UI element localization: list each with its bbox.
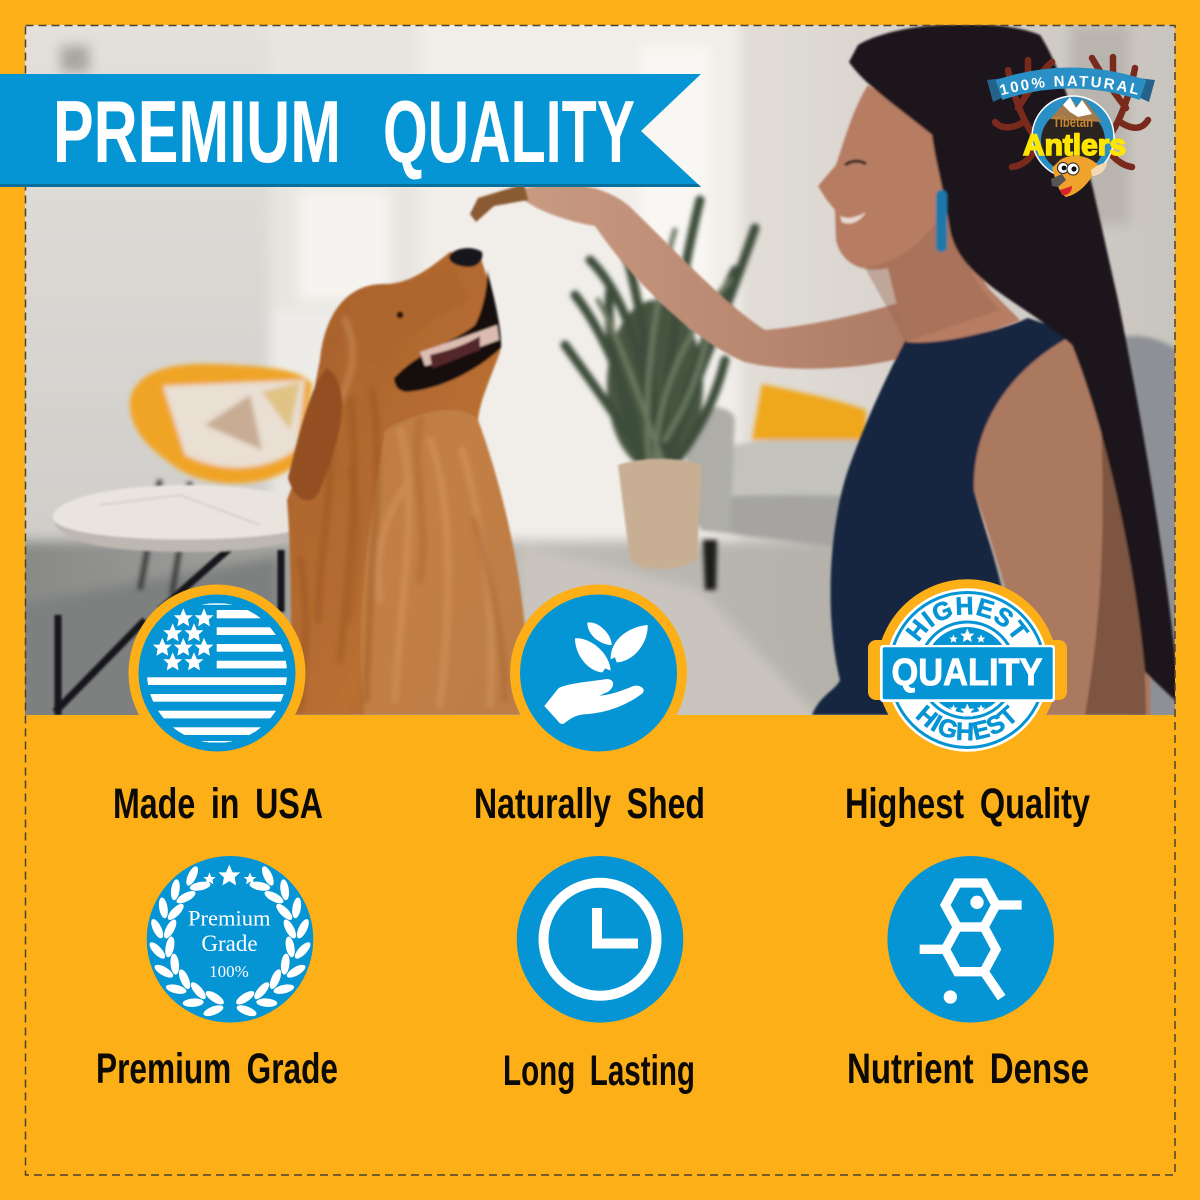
- far arm and hand: [522, 184, 925, 369]
- logo ribbon text: 100% NATURAL: [1000, 76, 1138, 96]
- wreath text: Premium: [188, 906, 271, 930]
- brand logo: [987, 54, 1155, 197]
- icon: highest quality seal: HIGHEST: [915, 704, 1016, 740]
- logo deer face: [1052, 156, 1098, 197]
- dog: [287, 248, 526, 715]
- plant in a woven pot: [565, 200, 755, 569]
- logo ribbon: [987, 78, 1155, 102]
- dress: [812, 318, 1075, 715]
- photo: woman offering a treat to a golden retriever in a living room: [25, 25, 1175, 715]
- yellow chair: [130, 364, 312, 595]
- label: Made in USA: Made in USA: [113, 780, 323, 828]
- logo antlers: [995, 57, 1148, 167]
- antler treat: [470, 184, 528, 222]
- wreath text: Grade: [201, 931, 258, 956]
- icon: molecule: [887, 856, 1054, 1023]
- icon: premium grade wreath: [146, 856, 314, 1023]
- logo badge: [1032, 96, 1114, 178]
- dog ear: [288, 368, 342, 500]
- icon: USA flag badge: [128, 584, 306, 762]
- logo wordmark: Tibetan: [1053, 114, 1093, 131]
- seal text: QUALITY: [892, 652, 1042, 694]
- heading text: PREMIUM: [53, 82, 341, 181]
- panel: orange lower section: [25, 715, 1175, 1175]
- hair: [849, 24, 1180, 705]
- label: Long Lasting: Long Lasting: [503, 1047, 695, 1095]
- wreath text: 100%: [209, 962, 249, 981]
- face and neck: [818, 85, 1020, 343]
- heading banner: [0, 74, 701, 187]
- woman: [522, 24, 1180, 715]
- dog chest fur: [361, 410, 526, 715]
- wreath left: [146, 862, 227, 1020]
- sofa and cushion: [684, 330, 1185, 730]
- brand logo: Antlers: [1023, 129, 1126, 162]
- icon: highest quality seal: [868, 579, 1067, 752]
- marble table: [52, 484, 290, 715]
- near arm: [974, 340, 1150, 715]
- wreath text: [188, 906, 271, 981]
- icon: highest quality seal: HIGHEST: [905, 596, 1030, 642]
- label: Naturally Shed: Naturally Shed: [474, 780, 705, 828]
- dog nose: [449, 248, 482, 267]
- wreath right: [233, 862, 314, 1020]
- label: Highest Quality: Highest Quality: [845, 780, 1090, 828]
- icon: clock: [517, 856, 683, 1023]
- icon: hand with leaves: [510, 584, 687, 762]
- room background: [25, 25, 1175, 715]
- label: Premium Grade: Premium Grade: [96, 1045, 338, 1093]
- dog fur texture: [300, 320, 505, 710]
- heading text: QUALITY: [383, 82, 635, 181]
- dog mouth: [394, 270, 501, 392]
- label: Nutrient Dense: Nutrient Dense: [847, 1045, 1089, 1093]
- earring: [936, 190, 947, 252]
